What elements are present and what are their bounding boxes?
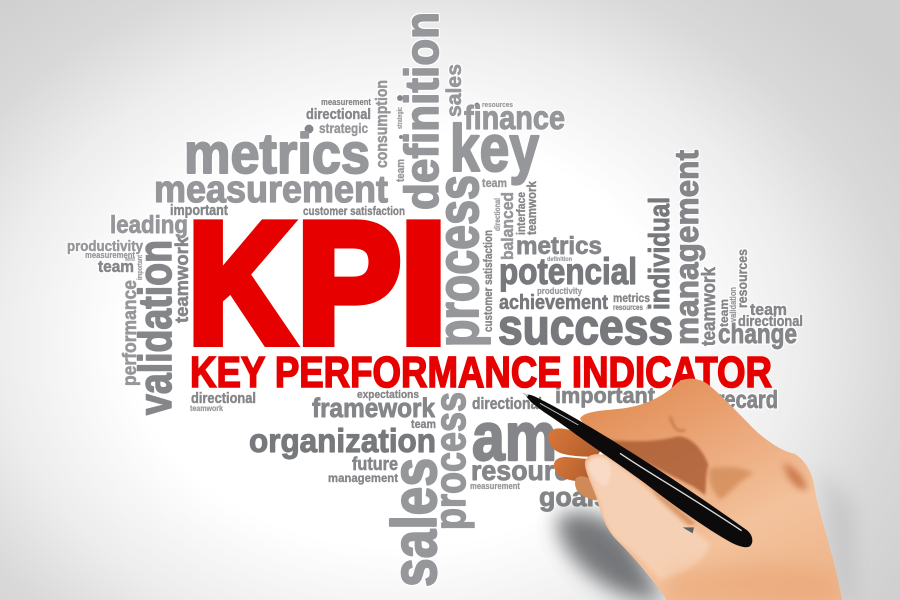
word cloud: upper left words: consumption — [372, 80, 391, 168]
title: KPI: I — [400, 188, 447, 379]
word cloud: lower centre words: goals — [539, 482, 609, 512]
word cloud: lower centre words: management — [328, 471, 398, 485]
word cloud: lower centre words — [249, 383, 778, 587]
lower fingers — [548, 428, 603, 501]
word cloud: lower centre words: scorecard — [682, 386, 778, 414]
word cloud: lower centre words: sales — [380, 458, 450, 587]
area below the pen — [652, 490, 695, 526]
word cloud: upper right words: achievement — [499, 292, 608, 314]
word cloud: upper right words: resources — [613, 303, 643, 312]
word cloud: far right words: team — [717, 299, 731, 327]
word cloud: lower centre words: future — [352, 454, 398, 474]
word cloud: upper right words: potencial — [499, 251, 637, 292]
word cloud: upper right words: directional — [493, 198, 502, 231]
word cloud: upper left words: customer satisfaction — [303, 204, 405, 218]
word cloud: upper right words: balanced — [498, 192, 517, 260]
word cloud: upper right words: interface — [514, 192, 528, 235]
word cloud: far right words: resources — [734, 249, 750, 308]
word cloud: upper left words — [154, 12, 466, 219]
word cloud: left side words: productivity — [67, 238, 144, 255]
word cloud: upper left words: strategic — [397, 107, 404, 129]
word cloud: upper right words: definition — [547, 257, 572, 263]
title: KPI: K — [188, 188, 293, 379]
word cloud: left side words: metrics — [125, 257, 135, 263]
word cloud: upper right words: key — [450, 111, 539, 185]
word cloud: upper right words: teamwork — [524, 180, 539, 235]
word cloud: upper right words: team — [482, 176, 507, 190]
word cloud: lower centre words: resources — [471, 455, 599, 486]
subtitle: key performance indicator: KEY PERFORMANCE INDICATOR — [190, 348, 772, 397]
word cloud: upper right words: metrics — [516, 232, 602, 260]
word cloud: upper left words: directional — [306, 106, 371, 123]
word cloud: left side words: performance — [120, 280, 141, 386]
shaded crease under the index finger — [595, 437, 708, 495]
title: KPI — [188, 188, 447, 379]
word cloud: far right words: validation — [728, 287, 738, 322]
word cloud: left side words: validation — [129, 240, 181, 415]
word cloud: upper right words: process — [426, 175, 491, 347]
word cloud: left side words: teamwork — [190, 404, 223, 413]
thumbnail highlight — [588, 458, 611, 487]
word cloud: upper right words: customer satisfaction — [481, 230, 495, 332]
word cloud: upper left words: measurement — [321, 97, 371, 107]
word cloud: far right words: teamwork — [699, 267, 720, 346]
word cloud: upper right words: finance — [464, 99, 565, 136]
word cloud: left side words: important — [137, 254, 144, 280]
word cloud: upper left words: definition — [395, 12, 448, 210]
skin shading clipped to the hand — [585, 417, 842, 600]
word cloud: upper left words: measurement — [154, 169, 388, 211]
word cloud: upper right words — [426, 99, 673, 355]
word cloud: upper left words: metrics — [184, 122, 370, 186]
knuckle detail — [783, 463, 807, 490]
illustration: hand holding a pen — [523, 379, 853, 600]
word cloud: left side words: measurement — [85, 250, 135, 260]
word cloud: far right words: individual — [644, 197, 676, 310]
word cloud: left side words: team — [98, 257, 134, 276]
word cloud: lower centre words: important — [555, 383, 656, 408]
word cloud: far right words: team — [750, 300, 787, 319]
word cloud: left side words: leading — [110, 211, 188, 239]
word cloud: far right words — [644, 150, 803, 349]
word cloud: lower centre words: measurement — [470, 481, 520, 491]
word cloud: upper left words: team — [395, 159, 407, 182]
word cloud: lower centre words: team — [411, 417, 436, 431]
word cloud: far right words: directional — [738, 313, 803, 330]
word cloud: upper right words: metrics — [613, 291, 650, 305]
word cloud: far right words: change — [718, 318, 797, 349]
word cloud: upper left words: sales — [443, 64, 466, 117]
pen — [523, 393, 752, 547]
word cloud: left side words: directional — [191, 390, 256, 407]
word cloud: far right words: management — [668, 150, 705, 345]
word cloud: left side words: teamwork — [172, 236, 192, 323]
lower palm warmth — [667, 565, 842, 600]
word cloud: lower centre words: process — [426, 392, 475, 530]
word cloud: upper right words: productivity — [537, 286, 582, 296]
wrinkle area beside the palm — [709, 467, 753, 500]
title: KPI: P — [297, 188, 401, 379]
gap between thumb and palm — [683, 527, 694, 533]
word cloud: lower centre words: expectations — [357, 389, 419, 401]
thumb — [585, 454, 710, 580]
word cloud: upper left words: important — [170, 202, 228, 219]
word cloud: left side words — [67, 211, 256, 415]
word cloud: lower centre words: organization — [249, 422, 436, 459]
word cloud: lower centre words: am — [472, 399, 557, 475]
word cloud: upper right words: success — [498, 299, 673, 355]
word cloud: upper right words: resources — [482, 102, 513, 109]
word cloud: lower centre words: framework — [312, 393, 436, 423]
back of hand and palm — [580, 379, 842, 600]
word cloud: lower centre words: directional — [472, 394, 542, 413]
word cloud: upper left words: strategic — [319, 120, 368, 136]
hand shadow — [557, 467, 853, 600]
